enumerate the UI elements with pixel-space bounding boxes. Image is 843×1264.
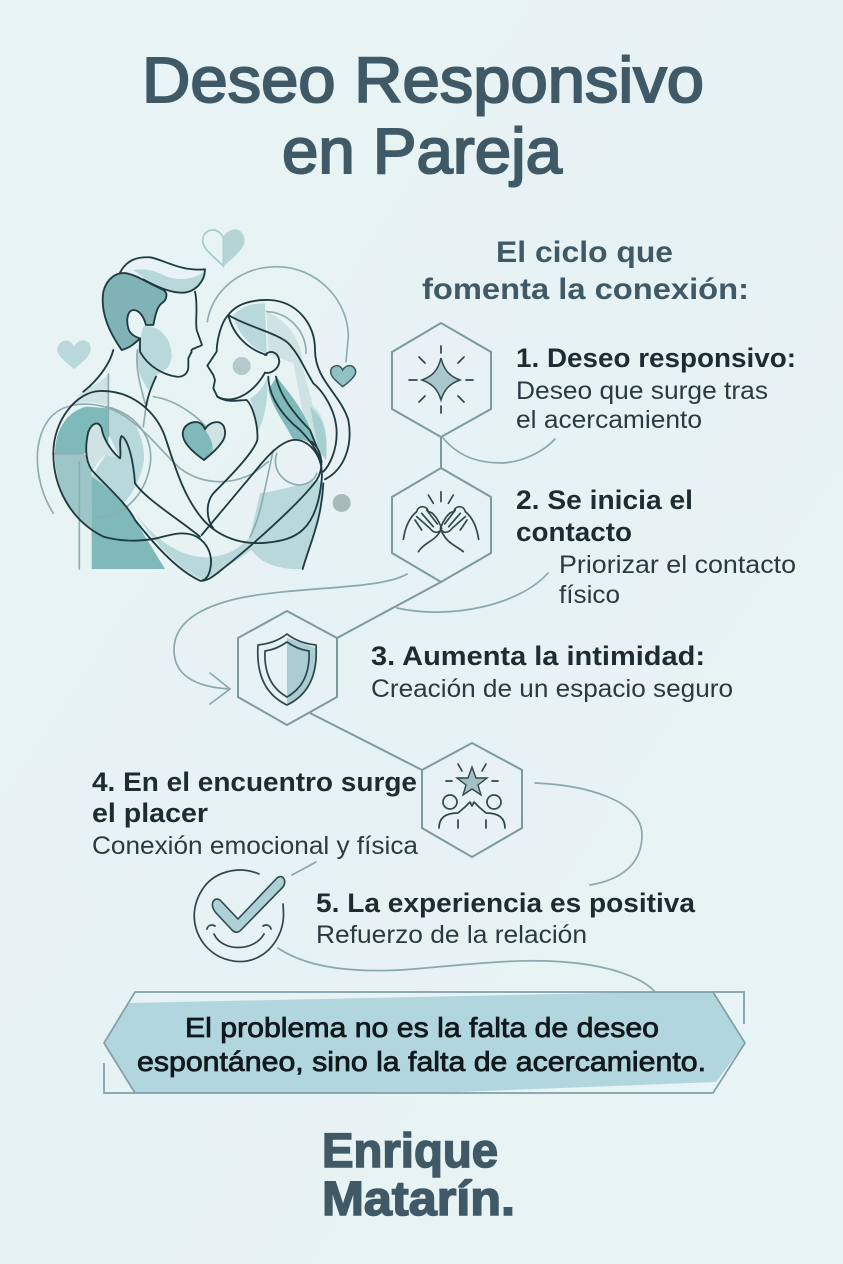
icon: half-filled heart top	[203, 229, 245, 266]
icon: star and people hexagon	[422, 743, 522, 857]
icon: sparkle hexagon	[392, 323, 491, 437]
dots	[233, 357, 351, 512]
step 2	[392, 468, 796, 609]
colour washes	[55, 269, 327, 581]
step 4: Conexión emocional y física	[92, 832, 418, 860]
step 2: contacto	[516, 517, 632, 547]
connectors	[174, 437, 655, 992]
step 1	[392, 323, 796, 437]
icon: joined hands hexagon	[392, 468, 491, 582]
step 1: Deseo que surge tras	[516, 377, 768, 405]
step 2: Priorizar el contacto	[559, 551, 796, 579]
step 5	[194, 870, 696, 961]
step 4: 4. En el encuentro surge	[92, 767, 417, 797]
arc around woman	[207, 267, 348, 362]
callout banner: El problema no es la falta de deseo	[185, 1012, 659, 1043]
callout banner: espontáneo, sino la falta de acercamiento.	[137, 1046, 706, 1077]
icon: small heart right	[331, 366, 356, 387]
brand footer: Matarín.	[322, 1173, 515, 1226]
step 1: 1. Deseo responsivo:	[516, 343, 796, 373]
step 5: Refuerzo de la relación	[316, 921, 587, 949]
step 3: Creación de un espacio seguro	[371, 675, 733, 703]
heading: cycle: fomenta la conexión:	[422, 273, 749, 306]
callout banner	[104, 992, 745, 1093]
illustration: couple embracing	[37, 229, 356, 581]
heading: cycle: El ciclo que	[496, 236, 673, 269]
icon: shield hexagon	[238, 611, 337, 725]
couple outlines	[53, 257, 350, 581]
title	[142, 44, 704, 187]
title: Deseo Responsivo	[142, 44, 704, 116]
step 1: el acercamiento	[516, 406, 702, 434]
step 5: 5. La experiencia es positiva	[316, 888, 696, 918]
heading: cycle	[422, 236, 749, 306]
brand footer	[322, 1125, 515, 1226]
step 4: el placer	[92, 798, 209, 828]
brand footer: Enrique	[322, 1125, 498, 1178]
step 2: 2. Se inicia el	[516, 485, 693, 515]
title: en Pareja	[282, 115, 562, 187]
thin grey arcs	[37, 312, 317, 569]
step 4	[92, 743, 522, 860]
step 2: físico	[559, 581, 620, 609]
icon: check smile circle	[194, 870, 285, 961]
icon: centre heart	[183, 422, 225, 460]
icon: pale heart left	[57, 340, 91, 369]
step 3: 3. Aumenta la intimidad:	[371, 641, 705, 671]
step 3	[238, 611, 733, 725]
